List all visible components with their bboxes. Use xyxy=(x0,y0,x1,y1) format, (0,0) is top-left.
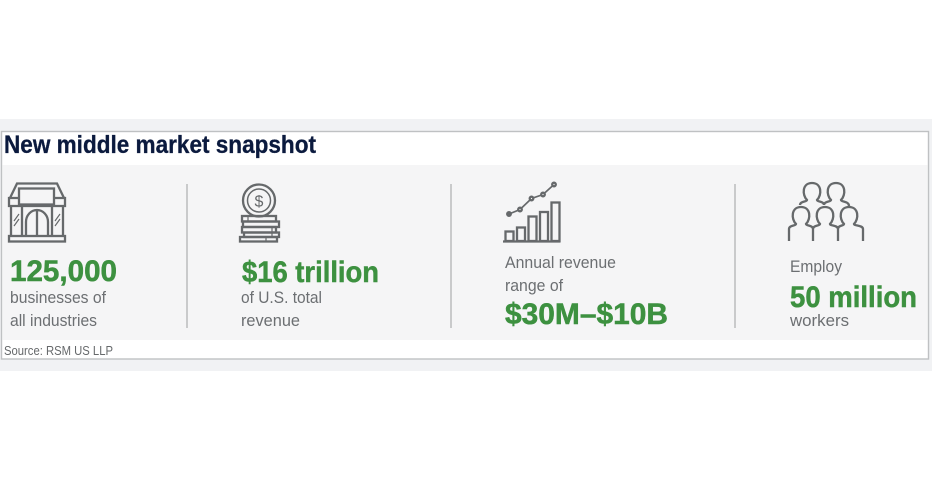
label: of U.S. total revenue: of U.S. total xyxy=(241,289,322,307)
stat: businesses xyxy=(9,184,117,330)
stat: revenue xyxy=(240,184,379,330)
label: annual revenue range of: Annual revenue xyxy=(505,254,616,272)
stat: workers xyxy=(789,183,917,330)
figure: $16 trillion: $16 trillion xyxy=(242,256,379,289)
label: businesses of all industries xyxy=(10,289,106,330)
icon: storefront xyxy=(9,184,65,242)
label: of U.S. total revenue: revenue xyxy=(241,312,300,330)
title: New middle market snapshot xyxy=(4,131,317,159)
figure: 125,000: 125,000 xyxy=(10,255,117,288)
figure: $30M–$10B: $30M–$10B xyxy=(505,298,668,331)
label: employ: Employ xyxy=(790,258,843,276)
icon: coin stack xyxy=(240,184,279,242)
icon: growth chart xyxy=(503,183,560,242)
label: annual revenue range of: range of xyxy=(505,277,563,295)
label: businesses of all industries: all industries xyxy=(10,312,97,330)
figure: 50 million: 50 million xyxy=(790,281,917,314)
label: workers: workers xyxy=(789,312,849,330)
icon: coin stack: $ xyxy=(255,194,264,210)
label: annual revenue range of xyxy=(505,254,616,295)
icon: group of people xyxy=(789,183,863,241)
source note: Source: RSM US LLP xyxy=(4,344,113,358)
label: of U.S. total revenue xyxy=(241,289,322,330)
panel: snapshot card xyxy=(2,132,928,359)
stat: annual revenue range xyxy=(503,183,668,331)
label: businesses of all industries: businesses of xyxy=(10,289,106,307)
